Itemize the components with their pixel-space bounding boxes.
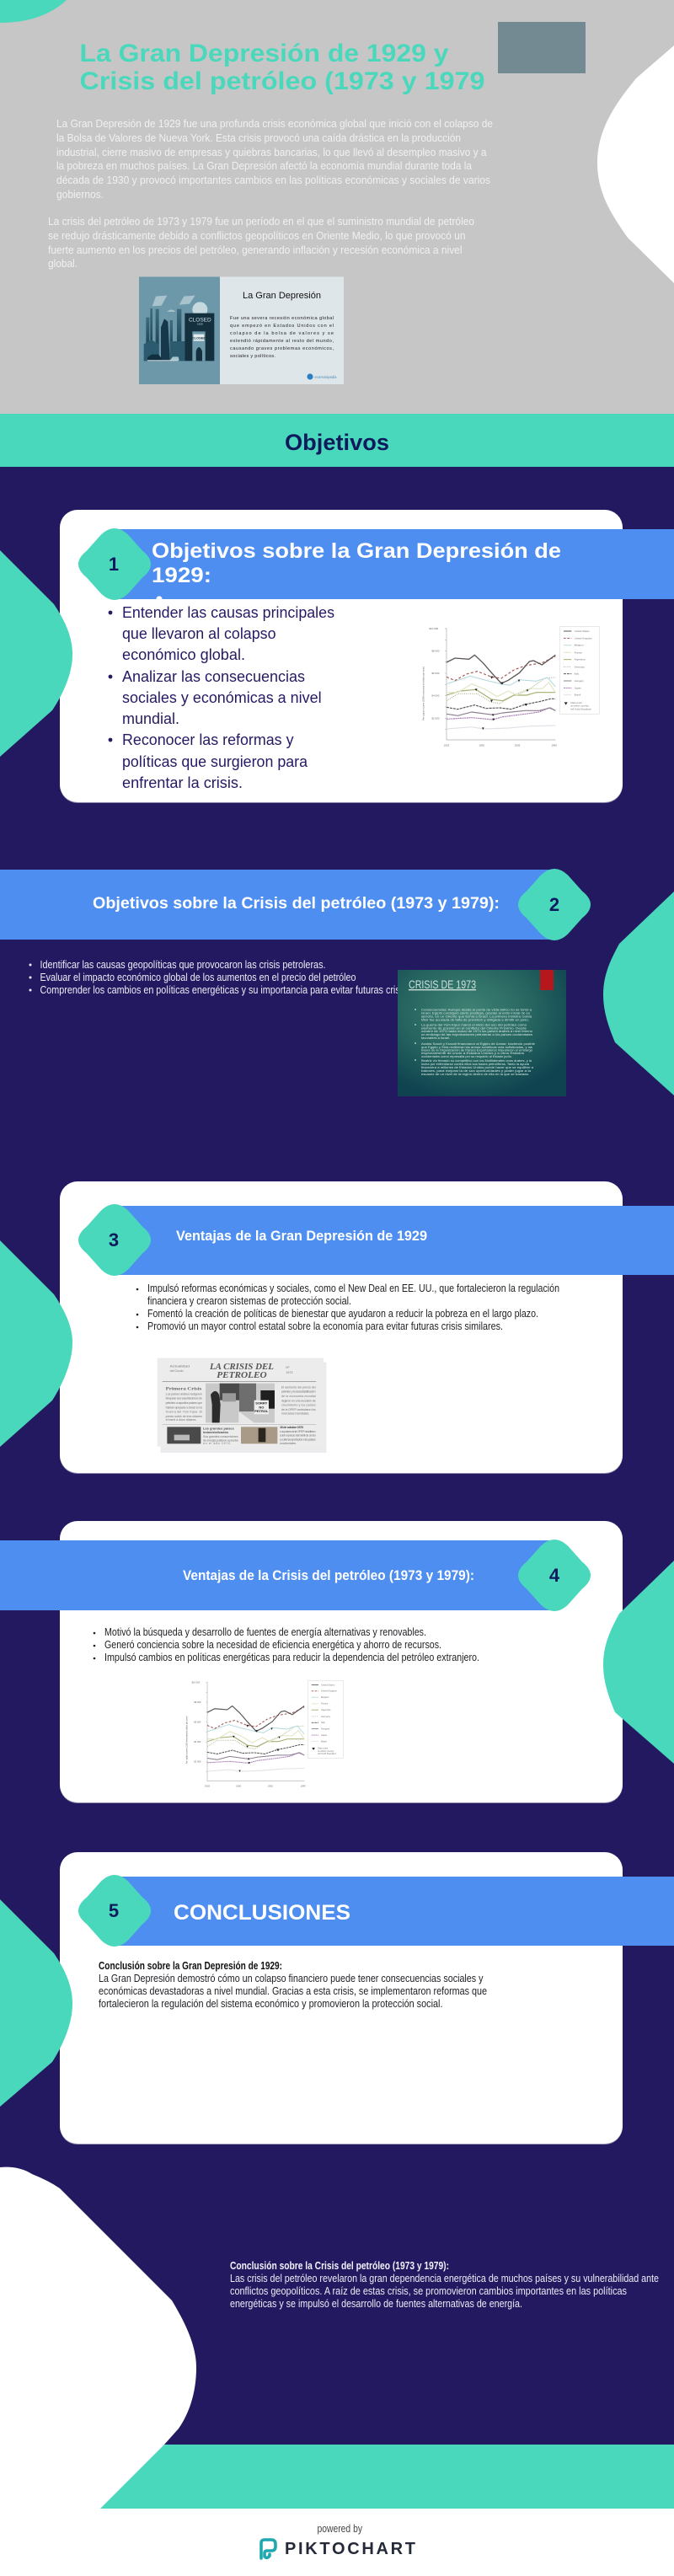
number badge 4: 4 — [549, 1565, 560, 1586]
image: newspaper: petróleo y la desestabilización — [281, 1390, 316, 1394]
bullet list: Entender las causas principales — [122, 604, 334, 621]
bullet list: sociales y económicas a nivel — [122, 689, 322, 706]
line chart: per capita income (repeat): Per capita income (1990 international dollars per year) — [185, 1716, 188, 1764]
conclusion text: Crisis del petróleo: Conclusión sobre la Crisis del petróleo (1973 y 1979): — [230, 2260, 449, 2272]
heading: CONCLUSIONES — [174, 1901, 350, 1925]
image: newspaper: Primera Crisis — [166, 1386, 202, 1391]
conclusion text: Gran Depresión: económicas devastadoras a nivel mundial. Gracias a esta crisis, se implementaron reformas que — [99, 1985, 487, 1997]
panel 5: conclusiones — [0, 1852, 674, 2145]
panel 4: ventajas Crisis del petróleo — [0, 1521, 674, 1803]
title: La Gran Depresión de 1929 y — [79, 40, 449, 67]
panel 1: objetivos Gran Depresión — [0, 510, 674, 803]
intro paragraph: Crisis del petróleo: La crisis del petróleo de 1973 y 1979 fue un período en el que el suministro mundial de petróleo — [48, 216, 474, 228]
conclusion text: Gran Depresión: fortalecieron la regulación del sistema económico y promovieron la protección social. — [99, 1998, 443, 2010]
slide body text: escasez de un nivel de la región dentro de ella en la que se traslada. — [421, 1072, 529, 1076]
footer band: teal — [84, 2445, 674, 2509]
conclusion text: Gran Depresión: Conclusión sobre la Gran Depresión de 1929: — [99, 1960, 282, 1972]
line chart: per capita income: $10 000 — [429, 627, 438, 630]
intro paragraph: Crisis del petróleo: fuerte aumento en los precios del petróleo, generando inflación y recesión económica a nivel — [48, 244, 462, 256]
line chart: per capita income (repeat): France — [321, 1702, 329, 1706]
slide body: colapso de la bolsa de valores y se — [230, 331, 334, 336]
line chart: per capita income: 1940 — [551, 744, 557, 747]
slide body text: Meir fue acusada de falta de previsión y obligada a dimitir en junio. — [421, 1018, 529, 1021]
line chart: per capita income: Per capita income (1990 international dollars per year) — [421, 667, 425, 720]
bullet list: económico global. — [122, 646, 245, 663]
line chart: per capita income: Date point — [570, 701, 582, 704]
bullet list: Analizar las consecuencias — [122, 668, 305, 685]
line chart: per capita income: France — [575, 651, 582, 654]
line chart: per capita income (repeat): Italy — [321, 1721, 326, 1724]
image: newspaper: 1973 — [286, 1371, 292, 1374]
slide body: extendió rápidamente al resto del mundo, — [230, 339, 334, 344]
header band — [0, 870, 554, 940]
bullet list — [29, 959, 409, 996]
line chart: per capita income: left Gold Standard — [570, 707, 591, 710]
newspaper photo: SORRY — [255, 1401, 268, 1406]
header band — [115, 1877, 674, 1946]
number badge 2 — [518, 869, 591, 940]
image: newspaper: Sus grandes consumidores — [203, 1435, 238, 1438]
bullet list: Impulsó reformas económicas y sociales, como el New Deal en EE. UU., que fortalecieron la regulación — [147, 1283, 559, 1294]
powered by Piktochart: powered by — [317, 2522, 362, 2535]
heading: Ventajas de la Gran Depresión de 1929 — [176, 1228, 427, 1244]
slide body text: Consecuencias: Aunque desde el punto de vista bélico no se tomó a — [421, 1008, 532, 1011]
intro paragraph: Crisis del petróleo — [48, 216, 474, 270]
image: newspaper: de energía pusieron a prueba — [203, 1438, 239, 1442]
slide body text: elemento de presión en el conflicto del Oriente Próximo. Desde — [421, 1026, 527, 1030]
heading — [152, 539, 561, 587]
line chart: per capita income: Italy — [575, 672, 580, 676]
panel 2: objetivos Crisis del petróleo — [0, 869, 674, 1096]
slide body: que empezó en Estados Unidos con el — [230, 324, 334, 329]
conclusion text: Crisis del petróleo: energéticas y se impulsó el desarrollo de fuentes alternativas de energía. — [230, 2298, 522, 2310]
placeholder rectangle — [498, 22, 586, 73]
illustration: closed factory: CLOSED — [189, 317, 211, 323]
conclusion text: Gran Depresión: La Gran Depresión demostró cómo un colapso financiero puede tener consecuencias sociales y — [99, 1973, 484, 1984]
line chart: per capita income (repeat): 1940 — [301, 1784, 306, 1787]
bullet list: enfrentar la crisis. — [122, 774, 243, 791]
image: Crisis de 1973 slide — [398, 970, 566, 1096]
line chart: per capita income (repeat): $8 000 — [194, 1700, 201, 1704]
intro paragraph: Gran Depresión: La Gran Depresión de 1929 fue una profunda crisis económica global que inició con el colapso de — [56, 118, 493, 130]
image: newspaper: Guerra del Yom Kipur. El — [166, 1411, 202, 1414]
line chart: per capita income (repeat): 1930 — [236, 1784, 242, 1787]
line chart: per capita income (repeat): 1925 — [205, 1784, 210, 1787]
line chart: per capita income: United Kingdom — [575, 636, 592, 640]
illustration: closed factory: 1929 — [197, 323, 203, 326]
image: newspaper: en el año 1974. — [203, 1442, 231, 1445]
header background — [0, 0, 674, 414]
slide body: sociales y políticos. — [230, 354, 275, 359]
line chart: per capita income (repeat): Date point — [318, 1747, 329, 1750]
slide body text: La guerra del Yom Kipur marcó el inicio del uso del petróleo como — [421, 1023, 527, 1026]
slide body: Fue una severa recesión económica global — [230, 316, 334, 321]
line chart: per capita income (repeat): $6 000 — [194, 1721, 201, 1724]
line chart: per capita income: 1925 — [444, 744, 450, 747]
economipedia logo: economipedia — [315, 375, 337, 379]
bullet list: Motivó la búsqueda y desarrollo de fuentes de energía alternativas y renovables. — [104, 1626, 426, 1638]
line chart: per capita income: $2 000 — [431, 716, 440, 720]
image: newspaper: LA CRISIS DEL — [209, 1363, 274, 1372]
intro paragraph: Gran Depresión: década de 1930 y provocó importantes cambios en las políticas económicas y sociales de varios — [56, 174, 490, 186]
heading: Objetivos sobre la Crisis del petróleo (1973 y 1979): — [93, 895, 500, 913]
number badge 1: 1 — [109, 554, 119, 575]
line chart: per capita income (repeat): Argentina — [321, 1708, 331, 1711]
image: La Gran Depresión slide — [139, 276, 344, 384]
slide body text: Israel, Egipto consiguió cierto prestigio, gracias al éxito inicial de su — [421, 1011, 530, 1015]
navy background — [0, 467, 674, 2445]
economipedia logo — [307, 373, 337, 380]
slide body text — [415, 1008, 536, 1076]
heading: Ventajas de la Crisis del petróleo (1973 y 1979): — [183, 1567, 474, 1583]
slide body text: Arabia Saudí y Kuwait financiaron al Egipto de Anwar, haciendo posible — [421, 1042, 536, 1046]
bullet list: Identificar las causas geopolíticas que provocaron las crisis petroleras. — [40, 959, 325, 971]
bullet list: Impulsó cambios en políticas energéticas para reducir la dependencia del petróleo extranjero. — [104, 1652, 479, 1663]
intro paragraph: Gran Depresión — [56, 118, 493, 201]
slide body text: que Egipto y Siria recibieran las armas soviéticas más sofisticadas, y las — [421, 1045, 532, 1049]
bullet list: Generó conciencia sobre la necesidad de eficiencia energética y ahorro de recursos. — [104, 1639, 441, 1651]
intro paragraph: Gran Depresión: industrial, cierre masivo de empresas y quiebras bancarias, lo que llevó al desempleo masivo y a — [56, 147, 487, 158]
image: newspaper: Actualidad — [170, 1365, 190, 1368]
slide body text: occidentales como represalia por su respaldo al Estado judío. — [421, 1054, 512, 1058]
footer shape: white blob — [0, 2167, 196, 2576]
line chart: per capita income: $4 000 — [431, 694, 440, 698]
bullet list: que llevaron al colapso — [122, 625, 276, 642]
newspaper photo: PETROL — [254, 1409, 269, 1413]
illustration: closed factory — [144, 296, 214, 361]
number badge 5 — [78, 1875, 151, 1947]
line chart: per capita income (repeat): Germany — [321, 1715, 331, 1718]
line chart: per capita income (repeat): $10 000 — [192, 1681, 201, 1684]
header shape: white blob — [597, 46, 674, 283]
number badge 1 — [78, 528, 151, 600]
image: newspaper: Nº — [286, 1366, 290, 1369]
number badge 2: 2 — [549, 894, 559, 915]
line chart: per capita income (repeat): Belgium — [321, 1695, 329, 1699]
slide body text: financiera a millones de Estados Unidos puede hacer que se equilibre a — [421, 1065, 534, 1069]
slide body text: balones, para mejorar la de sus oportunidades y poder jugar a la — [421, 1068, 532, 1073]
line chart: per capita income: Japan — [575, 686, 581, 689]
conclusion text: Gran Depresión — [99, 1960, 487, 2010]
header band — [115, 1206, 674, 1275]
image: newspaper: de la OPEP controlaron los — [281, 1408, 316, 1411]
slide body text: especialmente de crudo a Estados Unidos y a otros Estados — [421, 1051, 524, 1055]
image: newspaper: Los grandes países — [203, 1427, 234, 1430]
line chart: per capita income: Germany — [575, 665, 585, 668]
image: newspaper: el barril a doce dólares. — [166, 1418, 196, 1422]
image: newspaper: subir el precio del barril de crudo — [280, 1434, 316, 1438]
line chart: per capita income (repeat): at which country — [318, 1749, 334, 1753]
bullet list — [136, 1283, 559, 1332]
corner shape: teal — [0, 0, 67, 23]
powered by Piktochart — [261, 2522, 415, 2558]
line chart: per capita income: Argentina — [575, 658, 586, 661]
side shape — [603, 892, 674, 1095]
slide body — [230, 316, 334, 359]
bullet list: Promovió un mayor control estatal sobre la economía para evitar futuras crisis similares. — [147, 1320, 503, 1332]
intro paragraph: Crisis del petróleo: se redujo drásticamente debido a conflictos geopolíticos en Oriente Medio, lo que provocó un — [48, 230, 466, 242]
image: newspaper: El aumento del precio del — [281, 1385, 316, 1389]
header band — [0, 1540, 554, 1610]
intro paragraph: Gran Depresión: gobiernos. — [56, 189, 104, 201]
line chart: per capita income: $6 000 — [431, 672, 440, 675]
image: newspaper: crecimiento y los países — [281, 1404, 316, 1407]
line chart: per capita income (repeat): Hungary — [321, 1727, 330, 1731]
image: newspaper: dejaron en una recesión de — [281, 1399, 316, 1402]
bullet list — [94, 1626, 479, 1663]
line chart: per capita income: 1930 — [479, 744, 484, 747]
line chart: per capita income: Hungary — [575, 679, 584, 683]
line chart: per capita income (repeat): Japan — [321, 1733, 328, 1737]
line chart: per capita income (repeat): 1935 — [268, 1784, 273, 1787]
line chart: per capita income (repeat): $4 000 — [194, 1740, 201, 1743]
bullet list: mundial. — [122, 710, 179, 727]
heading: Objetivos sobre la Gran Depresión de — [152, 539, 561, 563]
image: Crisis de 1973 slide: CRISIS DE 1973 — [409, 978, 476, 991]
line chart: per capita income: United States — [575, 629, 590, 633]
image: newspaper: bloquear sus exportaciones de — [166, 1397, 202, 1400]
stray bullet tip — [156, 596, 163, 602]
line chart: per capita income — [421, 626, 599, 747]
image: newspaper: Los países de la OPEP decidieron — [280, 1430, 316, 1433]
bullet list: Evaluar el impacto económico global de los aumentos en el precio del petróleo — [40, 972, 356, 983]
title: Crisis del petróleo (1973 y 1979 — [79, 67, 485, 95]
image: newspaper: petróleo a aquellos países que — [166, 1401, 202, 1405]
image: newspaper: Los países árabes redujeron — [166, 1392, 202, 1395]
header band — [115, 529, 674, 599]
line chart: per capita income: 1935 — [515, 744, 521, 747]
slide body text: Beatriz vio frenado su competitivo con los Multilaterales unos árabes, y la — [421, 1058, 532, 1063]
bullet list: políticas que surgieron para — [122, 753, 308, 770]
slide body: causando graves problemas económicos, — [230, 346, 334, 351]
line chart: per capita income (repeat): Brazil — [321, 1739, 327, 1743]
bullet list: Reconocer las reformas y — [122, 731, 293, 748]
number badge 5: 5 — [109, 1900, 119, 1921]
number badge 3 — [78, 1204, 151, 1276]
image: newspaper: industrializados — [203, 1431, 228, 1434]
side shape — [0, 1899, 72, 2107]
image: newspaper: PETROLEO — [217, 1371, 267, 1380]
line chart: per capita income (repeat): United States — [321, 1683, 335, 1686]
line chart: per capita income: Brazil — [575, 694, 580, 697]
intro paragraph: Crisis del petróleo: global. — [48, 258, 78, 270]
image: newspaper: habían apoyado a Israel en la — [166, 1406, 203, 1409]
image: newspaper: de la economía mundial — [281, 1395, 316, 1398]
bullet list — [109, 604, 334, 791]
number badge 4 — [518, 1540, 591, 1611]
heading: 1929: — [152, 564, 211, 587]
intro paragraph: Gran Depresión: la pobreza en muchos países. La Gran Depresión afectó la economía mundial durante toda la — [56, 160, 472, 172]
title — [79, 40, 485, 95]
icon: Piktochart logo — [261, 2540, 275, 2558]
image: newspaper: occidentales. — [280, 1442, 297, 1445]
newspaper photo — [206, 1384, 275, 1422]
newspaper photo: NO — [259, 1405, 264, 1409]
objetivos banner — [0, 414, 674, 467]
conclusion text: Crisis del petróleo — [230, 2260, 659, 2310]
line chart: per capita income: at which country — [570, 704, 589, 708]
panel 3: ventajas Gran Depresión — [0, 1181, 674, 1474]
line chart: per capita income: $8 000 — [431, 649, 440, 652]
illustration: closed factory: CLOSED — [192, 336, 206, 340]
slide body text: favorables a Israel. — [421, 1036, 450, 1040]
line chart: per capita income (repeat): left Gold Standard — [318, 1752, 336, 1755]
line chart: per capita income (repeat): United Kingdom — [321, 1690, 338, 1693]
bullet list: Comprender los cambios en políticas energéticas y su importancia para evitar futuras crisis. — [40, 984, 409, 996]
conclusion text: Crisis del petróleo: conflictos geopolíticos. A raíz de estas crisis, se promovieron cambios importantes en las políticas — [230, 2285, 627, 2297]
slide title: La Gran Depresión — [243, 291, 321, 301]
slide body text: ejército, en un Oriente que temía a Israel. La primera ministra Golda — [421, 1015, 532, 1018]
image: newspaper — [158, 1358, 326, 1453]
line chart: per capita income: Belgium — [575, 644, 584, 647]
bottom photos — [167, 1427, 201, 1443]
slide body text: bases de la Organización de Países Exportadores impusieron el embargo — [421, 1048, 533, 1052]
slide body text: un embargo de las exportaciones petroleras a los países occidentales — [421, 1032, 532, 1036]
number badge 3: 3 — [109, 1229, 119, 1251]
line chart: per capita income (repeat) — [185, 1680, 343, 1787]
side shape — [603, 1561, 674, 1764]
objetivos banner: Objetivos — [285, 430, 389, 455]
side shape — [0, 1240, 72, 1447]
slide body text: octubre de 1973 hasta marzo de 1974 los países árabes a nivel interno — [421, 1029, 533, 1033]
image: newspaper: y cortar la exportación a los países — [280, 1438, 316, 1441]
line chart: per capita income (repeat): $2 000 — [194, 1760, 201, 1764]
image: newspaper: precio subió de tres dólares — [166, 1415, 202, 1418]
image: newspaper: del Crudo — [170, 1369, 184, 1373]
bullet list: Fomentó la creación de políticas de bienestar que ayudaron a reducir la pobreza en el largo plazo. — [147, 1308, 538, 1320]
bullet list: financiera y crearon sistemas de protección social. — [147, 1295, 351, 1307]
image: newspaper: mercados mundiales. — [281, 1412, 309, 1416]
powered by Piktochart: PIKTOCHART — [285, 2540, 415, 2558]
image: newspaper: 16 de octubre 1973 — [280, 1426, 303, 1429]
intro paragraph: Gran Depresión: la Bolsa de Valores de Nueva York. Esta crisis provocó una caída drástica en la producción — [56, 132, 461, 144]
slide body text: lucha por enfrentarse contra ellos sus bases petrolíferas. Tanto la ayuda — [421, 1062, 530, 1066]
side shape — [0, 550, 72, 757]
